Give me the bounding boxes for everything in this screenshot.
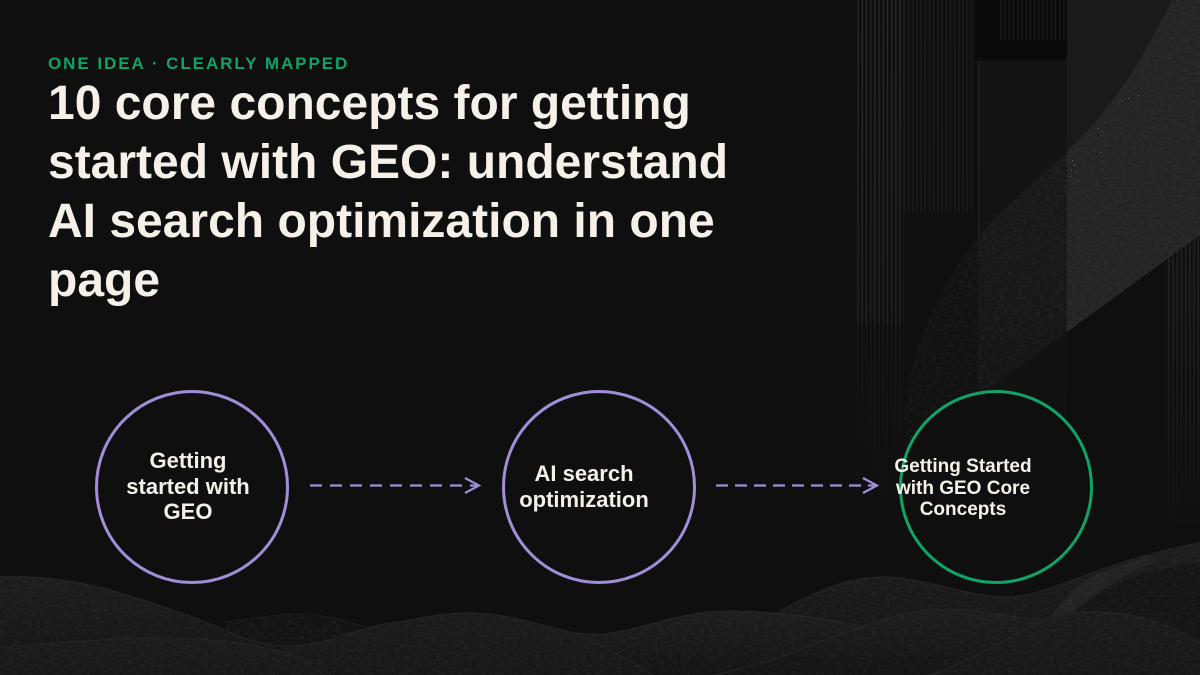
node: Getting started with GEO: started with (126, 474, 250, 499)
node: Getting Started with GEO Core Concepts: Concepts (920, 499, 1006, 520)
node: AI search optimization: AI search (534, 461, 634, 486)
speckle dots (1070, 95, 1139, 181)
decorative towers and ribbon (857, 0, 1200, 460)
node: Getting Started with GEO Core Concepts: with GEO Core (895, 478, 1030, 499)
node: Getting Started with GEO Core Concepts (894, 392, 1092, 582)
arrow: first to second node (310, 478, 479, 493)
title: page (48, 254, 160, 307)
node: Getting Started with GEO Core Concepts: Getting Started (894, 456, 1032, 477)
arrow: second to third node (716, 478, 877, 493)
wave landscape (0, 542, 1200, 675)
title: AI search optimization in one (48, 195, 715, 248)
node: Getting started with GEO: GEO (164, 499, 212, 524)
title: 10 core concepts for getting (48, 77, 691, 130)
node: AI search optimization (504, 392, 694, 582)
node: AI search optimization: optimization (519, 487, 649, 512)
title (48, 77, 728, 307)
eyebrow label: ONE IDEA · CLEARLY MAPPED (48, 54, 349, 73)
node: Getting started with GEO: Getting (150, 448, 226, 473)
node: Getting started with GEO (96, 392, 288, 582)
title: started with GEO: understand (48, 136, 728, 189)
